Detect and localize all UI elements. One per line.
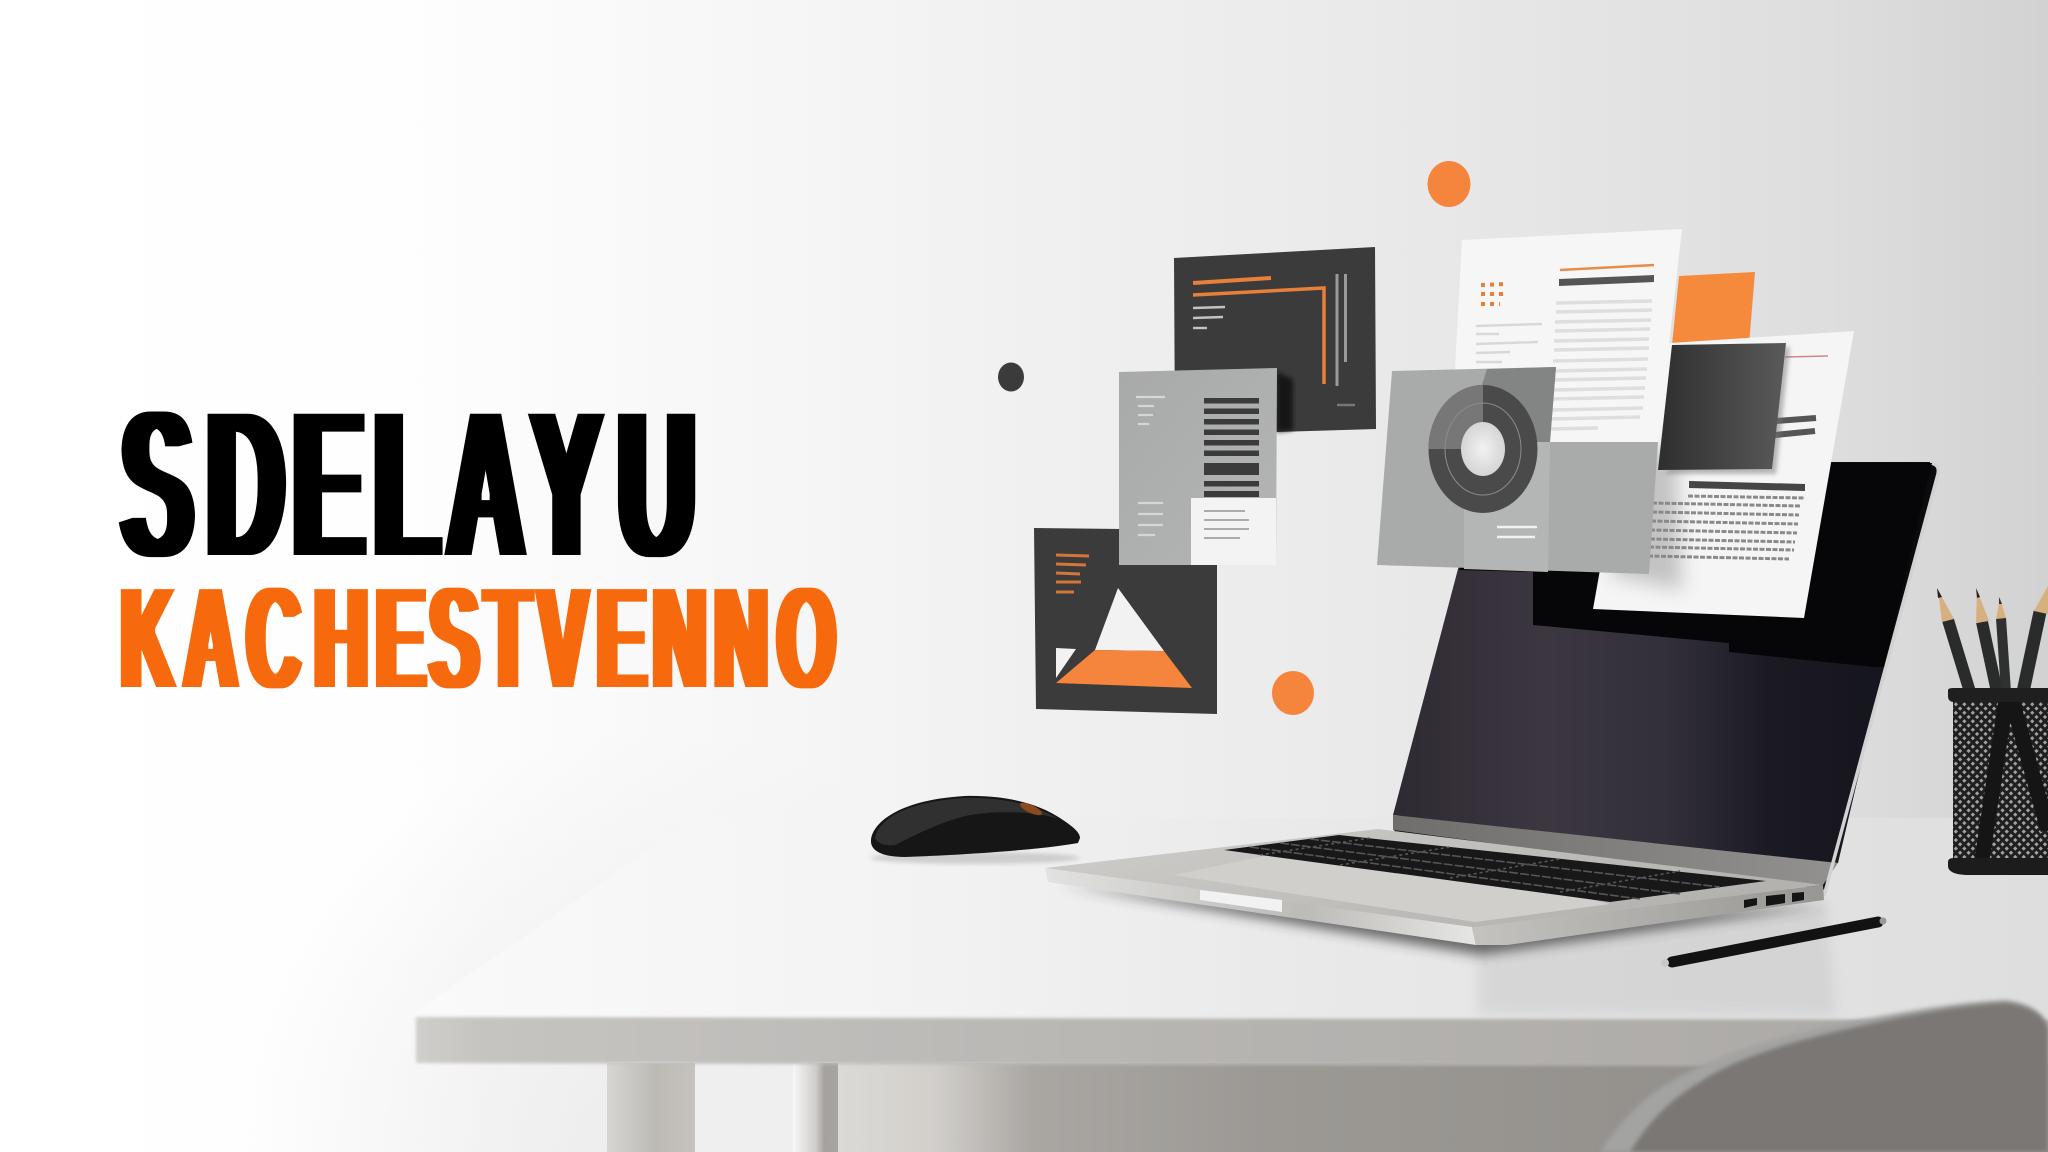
keyboard — [1224, 835, 1766, 902]
floating document: top white page — [1451, 229, 1682, 442]
laptop — [1045, 462, 1939, 955]
floating panel: donut chart card — [1377, 367, 1658, 574]
triangle chart — [1056, 588, 1192, 688]
chair back — [1600, 1000, 2048, 1152]
floating panel: dark lines card — [1174, 247, 1376, 440]
desk — [408, 818, 2048, 1152]
pencil cup — [1937, 586, 2048, 875]
title line 2: KACHESTVENNO — [121, 555, 835, 721]
pencils — [1937, 586, 2048, 692]
floating panel shadow on screen — [1459, 463, 1932, 667]
floating orange rectangle — [1672, 272, 1755, 345]
laptop shadow — [1060, 885, 1830, 955]
mouse — [870, 796, 1080, 864]
donut card shadow on page — [1610, 450, 1682, 590]
floating panel: dark translucent card — [1658, 343, 1790, 474]
pen — [1661, 918, 1886, 967]
laptop ports — [1744, 892, 1804, 908]
donut chart — [1428, 385, 1538, 513]
title — [121, 364, 835, 721]
floating panel: gray list card — [1119, 368, 1277, 565]
floating panel: dark triangle chart — [1034, 528, 1217, 714]
laptop lid and screen — [1393, 462, 1939, 896]
laptop base — [1045, 829, 1824, 945]
floating document: right text page — [1593, 331, 1854, 618]
title line 1: SDELAYU — [121, 364, 695, 604]
decorative dots — [998, 161, 1470, 715]
